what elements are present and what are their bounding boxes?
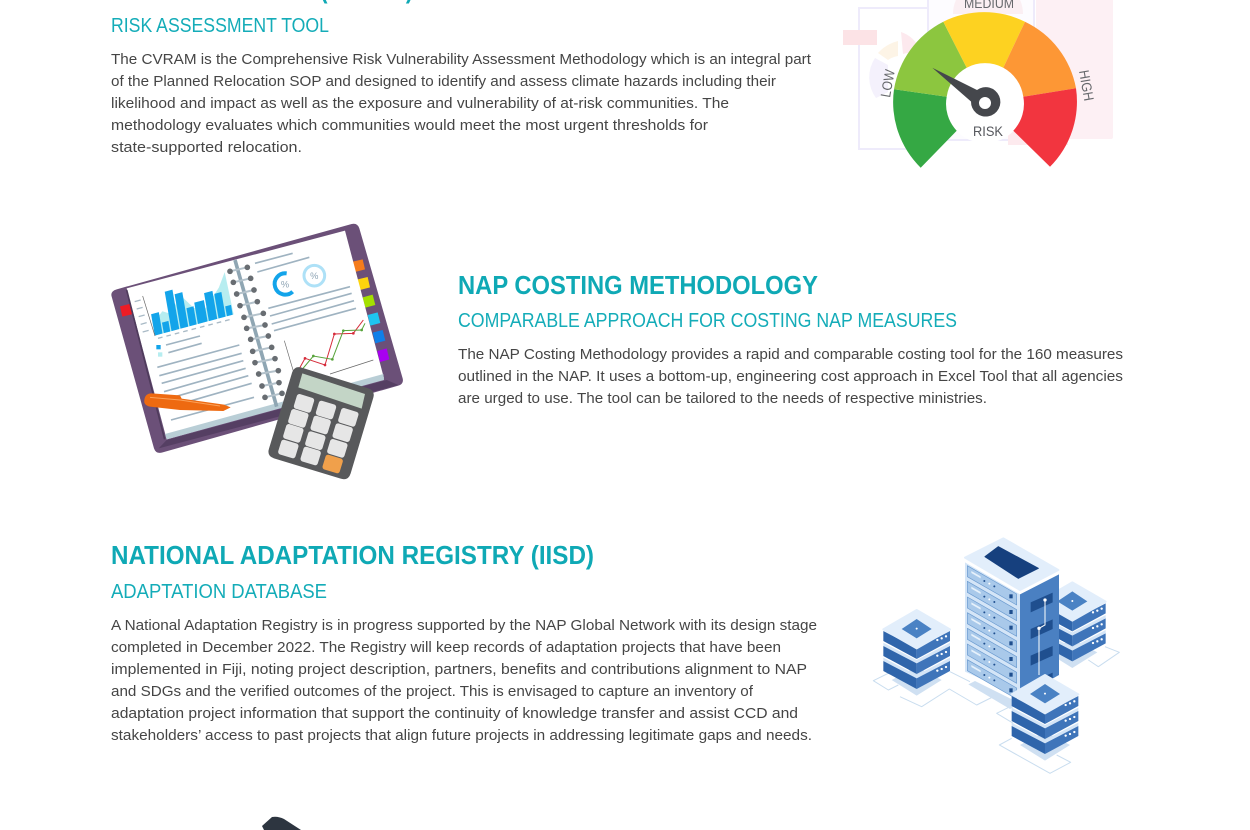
section subtitle: adaptation database: ADAPTATION DATABASE: [111, 581, 327, 603]
bar chart: [147, 272, 234, 336]
gauge segment: red: [1013, 88, 1077, 167]
percent donut: blue: [275, 273, 293, 295]
gauge segment: dark green: [893, 89, 957, 168]
chart axis ticks and legend: [135, 300, 231, 357]
text block: registry description: and SDGs and the verified outcomes of the project. This is envisaged to capture an inventory of: [111, 683, 754, 700]
gauge label: RISK: RISK: [973, 123, 1004, 139]
notebook cover: [111, 224, 403, 453]
main server tower: [965, 538, 1059, 699]
notebook pages: [127, 231, 384, 439]
gauge segment: light green: [894, 22, 967, 97]
text block: CVRAM description: The CVRAM is the Comprehensive Risk Vulnerability Assessment Methodology which is an integral part: [111, 51, 812, 68]
icon: risk gauge with pale documents behind: [843, 0, 1113, 168]
tower shadow: [968, 681, 1020, 709]
text block: CVRAM description: state-supported relocation.: [111, 139, 302, 156]
text block: CVRAM description: likelihood and impact as well as the exposure and vulnerability of at-risk communities. The: [111, 95, 729, 112]
notebook tabs: [120, 259, 389, 362]
text block: registry description: A National Adaptation Registry is in progress supported by the NAP Global Network with its design stage: [111, 617, 817, 634]
text lines, left page: [157, 336, 254, 420]
gauge label: LOW: LOW: [877, 67, 898, 99]
text lines, right page: [255, 253, 356, 331]
network lines: [873, 647, 1119, 773]
white connector: [1037, 598, 1047, 675]
pen: [144, 393, 231, 411]
gauge label: HIGH: HIGH: [1076, 69, 1097, 102]
section heading: NAP costing methodology: NAP COSTING METHODOLOGY: [458, 270, 818, 300]
percent donut: pale: %: [310, 271, 318, 281]
text block: registry description: [111, 617, 817, 744]
section subtitle: comparable approach: COMPARABLE APPROACH FOR COSTING NAP MEASURES: [458, 310, 957, 332]
text block: registry description: completed in December 2022. The Registry will keep records of adaptation projects that have been: [111, 639, 781, 656]
percent donut: pale: [304, 265, 325, 286]
text block: CVRAM description: of the Planned Relocation SOP and designed to identify and assess climate hazards including their: [111, 73, 776, 90]
text block: NAP costing description: outlined in the NAP. It uses a bottom-up, engineering cost approach in Excel Tool that all agencies: [458, 368, 1123, 385]
text block: NAP costing description: The NAP Costing Methodology provides a rapid and comparable costing tool for the 160 measures: [458, 346, 1123, 363]
text block: registry description: implemented in Fiji, noting project description, partners, benefits and contributions alignment to NAP: [111, 661, 807, 678]
front server stack: [1012, 675, 1078, 761]
text block: CVRAM description: methodology evaluates which communities would meet the most urgent thresholds for: [111, 117, 708, 134]
gauge segment: orange: [1003, 22, 1076, 97]
text block: registry description: adaptation project information that support the continuity of knowledge transfer and assist CCD and: [111, 705, 798, 722]
section heading: national adaptation registry: NATIONAL ADAPTATION REGISTRY (IISD): [111, 540, 594, 570]
text block: NAP costing description: are urged to use. The tool can be tailored to the needs of respective ministries.: [458, 390, 987, 407]
gauge segment: yellow: [943, 12, 1025, 68]
illustration: isometric servers: [873, 538, 1119, 773]
left server stack: [883, 610, 950, 696]
line chart: [284, 320, 373, 374]
illustration: notebook, pen and calculator: [111, 224, 403, 479]
icon: clipped dark object at bottom edge: [262, 817, 301, 830]
text block: CVRAM description: [111, 51, 812, 156]
text block: registry description: stakeholders’ access to past projects that align future projects in addressing legitimate gaps and needs.: [111, 727, 812, 744]
gauge needle: [932, 68, 1000, 117]
text block: NAP costing description: [458, 346, 1123, 407]
calculator: [268, 367, 374, 479]
right server stack: [1039, 582, 1106, 668]
percent donut: blue: %: [281, 279, 289, 289]
spiral binding: [227, 260, 285, 407]
section subtitle: risk assessment tool: RISK ASSESSMENT TOOL: [111, 15, 329, 37]
